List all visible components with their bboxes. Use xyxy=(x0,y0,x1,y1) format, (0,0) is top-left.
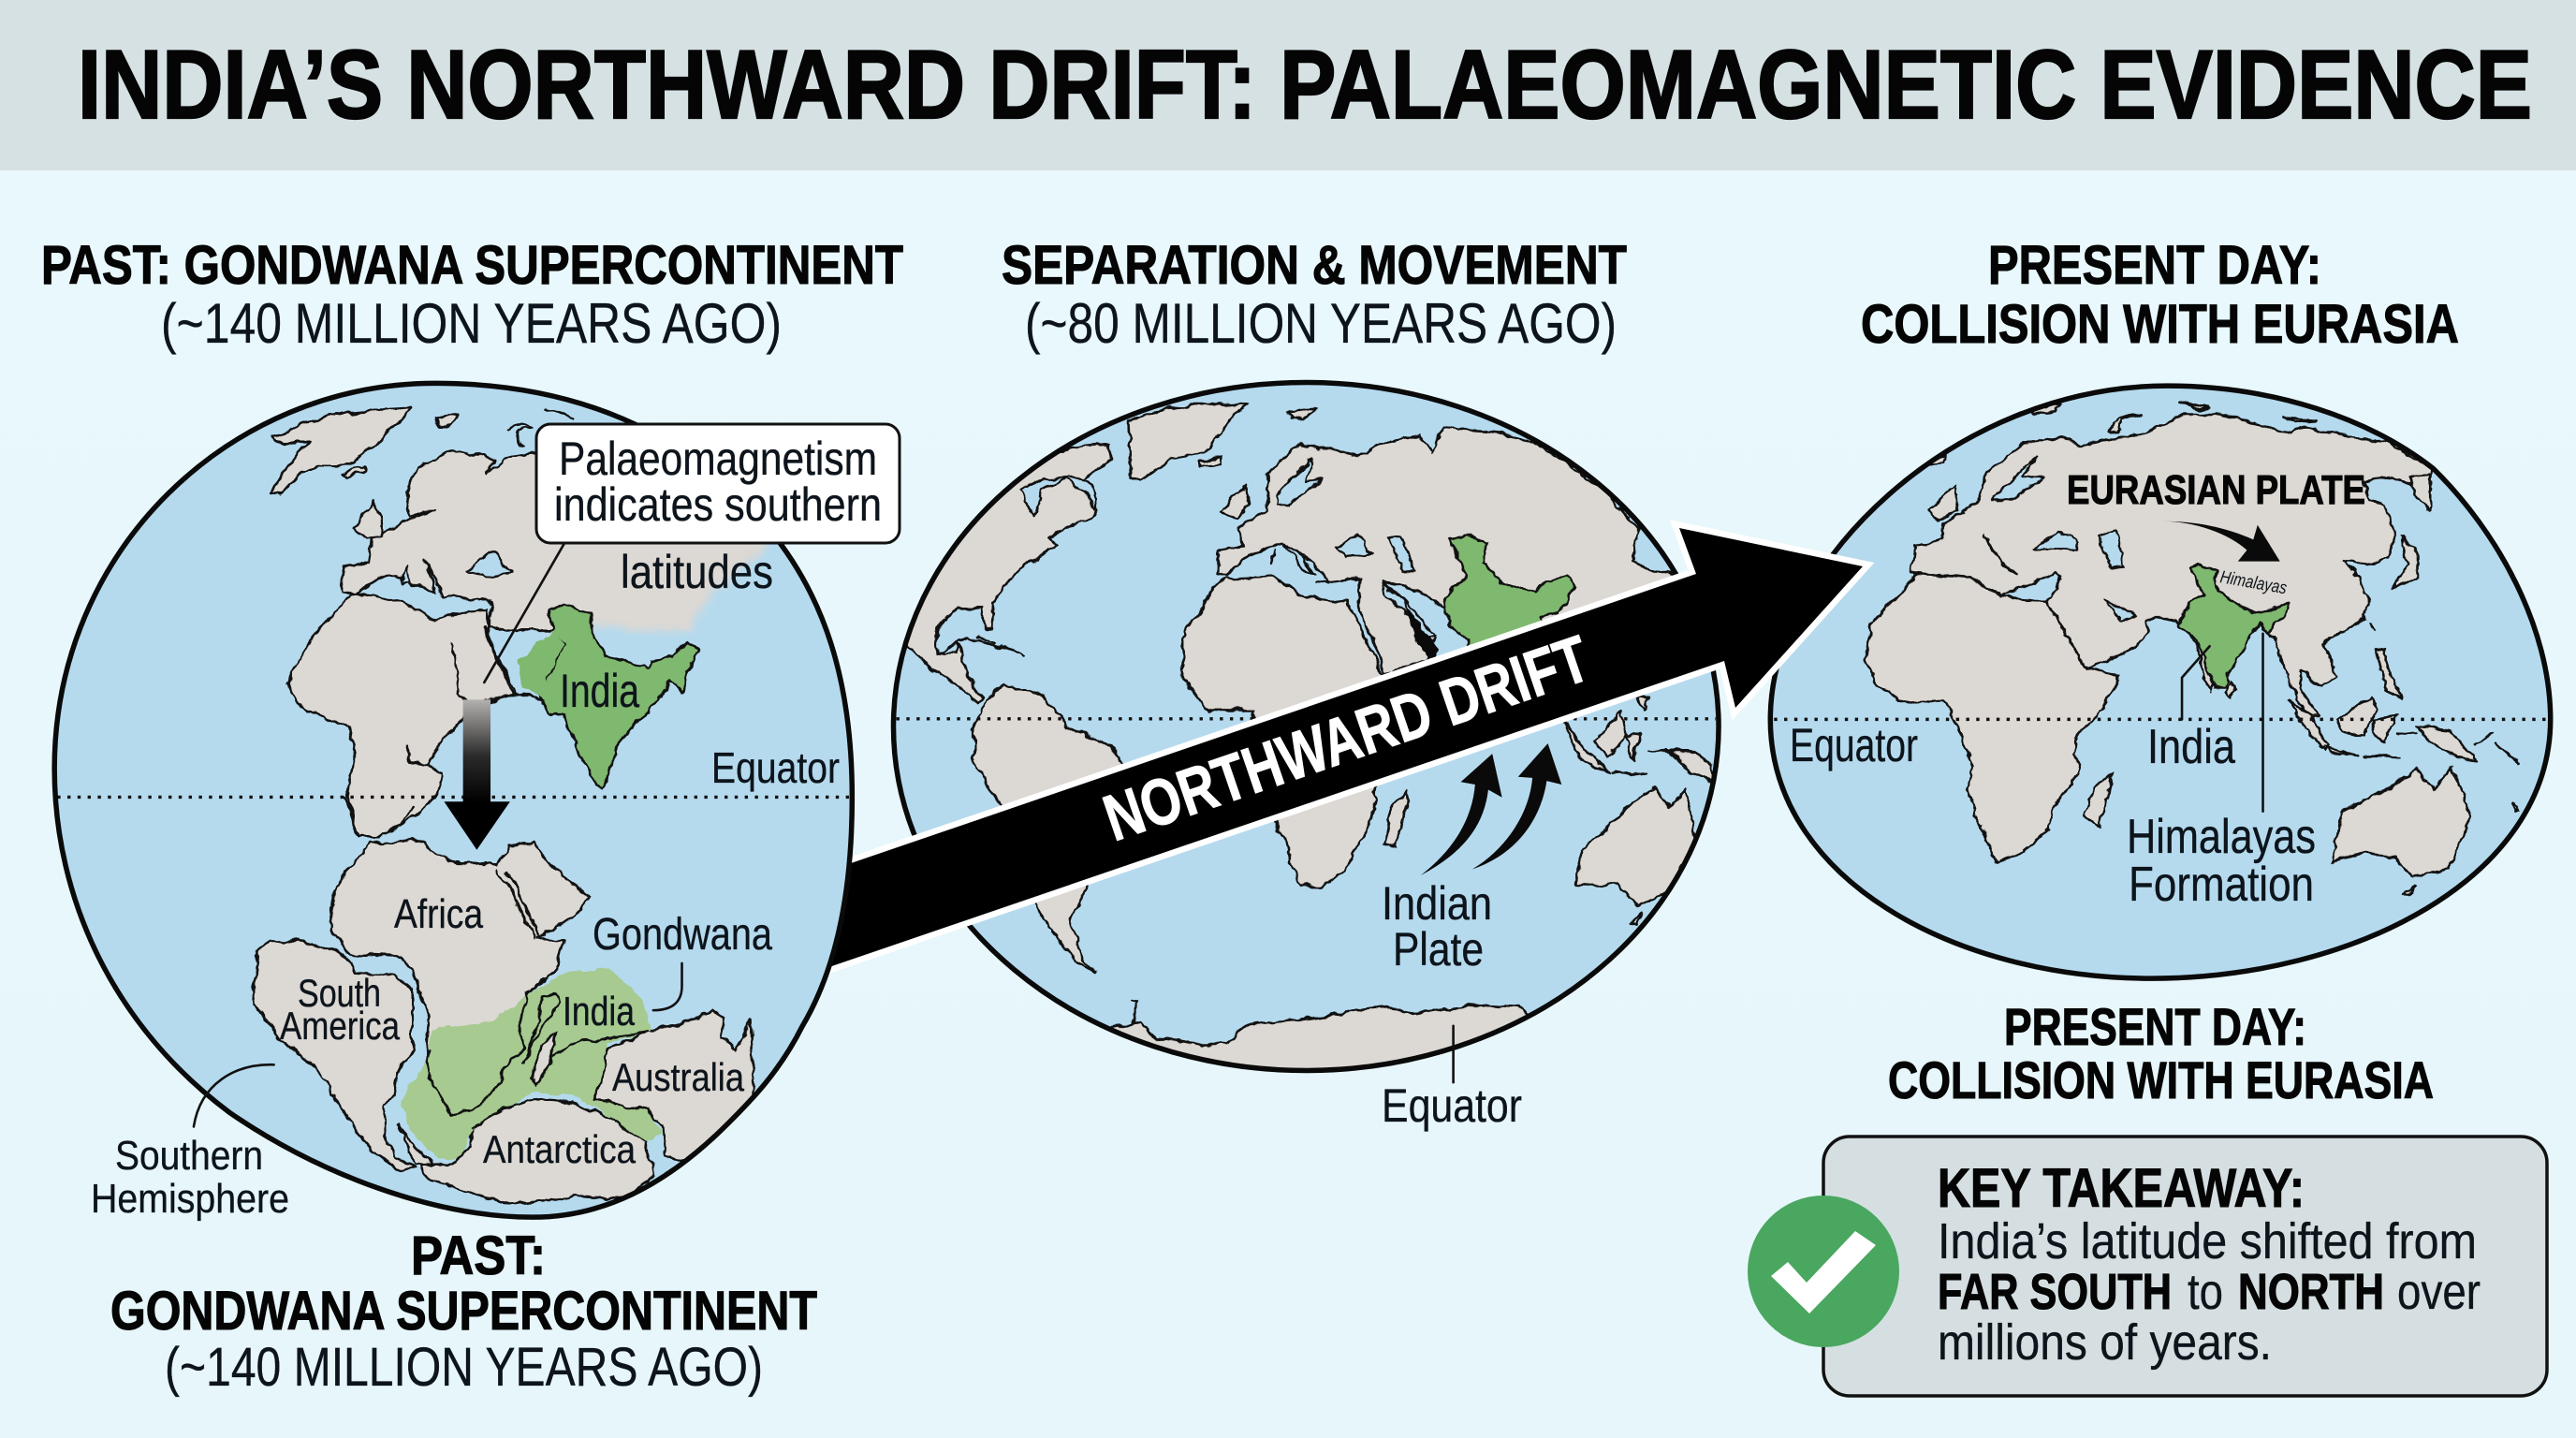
equator line xyxy=(1774,718,2546,721)
label: equator, right globe: Equator xyxy=(1790,719,1918,771)
ocean xyxy=(1770,386,2551,978)
label: Himalayas Formation: Himalayas xyxy=(2127,810,2316,864)
label: Southern Hemisphere xyxy=(91,1133,289,1222)
landmasses xyxy=(255,408,768,1204)
heading: present day: COLLISION WITH EURASIA xyxy=(1861,294,2459,355)
takeaway body: NORTH xyxy=(2238,1264,2384,1320)
heading: present day: PRESENT DAY: xyxy=(1988,235,2321,296)
globe outline xyxy=(893,383,1719,1071)
leader: equator xyxy=(1452,1026,1455,1082)
label: Antarctica: Antarctica xyxy=(483,1127,637,1171)
label: Africa: Africa xyxy=(394,891,483,937)
landmasses xyxy=(907,402,1713,1068)
icon: check mark xyxy=(1748,1196,1899,1347)
label: equator, middle globe: Equator xyxy=(1382,1079,1522,1132)
leader: southern hemisphere xyxy=(194,1064,274,1126)
ocean xyxy=(54,383,852,1217)
globe outline xyxy=(1770,386,2551,978)
icon: drift arrow two xyxy=(1472,743,1561,870)
label: equator, left globe: Equator xyxy=(711,743,840,792)
label: Southern Hemisphere: Hemisphere xyxy=(91,1176,289,1222)
label: Himalayas Formation xyxy=(2127,810,2316,912)
label: South America: America xyxy=(280,1004,401,1048)
takeaway body: FAR SOUTH xyxy=(1938,1264,2172,1320)
caption: past: PAST: xyxy=(411,1225,546,1286)
caption: past: (~140 MILLION YEARS AGO) xyxy=(165,1337,763,1398)
leader: Himalayas xyxy=(2261,634,2264,812)
globe: present day xyxy=(1770,386,2551,978)
label: Gondwana: Gondwana xyxy=(593,910,772,960)
arrow label: NORTHWARD DRIFT xyxy=(1095,622,1599,855)
takeaway body: millions of years. xyxy=(1938,1314,2272,1371)
globe: separation, 80 million years ago xyxy=(865,383,1719,1126)
heading: past: PAST: GONDWANA SUPERCONTINENT xyxy=(41,235,903,296)
takeaway body: India’s latitude shifted from xyxy=(1938,1213,2477,1269)
caption: past: GONDWANA SUPERCONTINENT xyxy=(110,1281,817,1342)
takeaway heading: KEY TAKEAWAY: xyxy=(1938,1158,2305,1219)
leader: Gondwana xyxy=(653,963,682,1010)
caption: past xyxy=(110,1225,817,1398)
equator line xyxy=(57,796,849,799)
callout: palaeomagnetism: indicates southern xyxy=(554,478,882,531)
label: Australia: Australia xyxy=(612,1055,745,1099)
callout: palaeomagnetism: Palaeomagnetism xyxy=(559,433,877,485)
heading: past: (~140 MILLION YEARS AGO) xyxy=(161,292,782,355)
heading: past xyxy=(41,235,903,355)
label: Indian Plate: Plate xyxy=(1393,923,1484,976)
label: Southern Hemisphere: Southern xyxy=(115,1133,263,1179)
label: Himalayas Formation: Formation xyxy=(2129,858,2314,912)
globe outline xyxy=(54,383,852,1217)
equator line xyxy=(897,717,1716,720)
callout: palaeomagnetism xyxy=(536,424,900,543)
icon: Eurasian plate arrow xyxy=(2160,521,2280,562)
icon: drift arrow one xyxy=(1421,754,1502,875)
caption: present day xyxy=(1888,997,2434,1109)
label: India, right globe: India xyxy=(2147,720,2235,774)
leader: callout xyxy=(484,543,564,682)
arrow: southward gradient xyxy=(444,699,510,850)
heading: separation xyxy=(1002,235,1627,355)
caption: present day: PRESENT DAY: xyxy=(2004,997,2306,1056)
label: South America xyxy=(280,971,401,1048)
green: Gondwana India region xyxy=(402,969,662,1158)
leader: India xyxy=(2182,646,2210,719)
landmasses xyxy=(1866,402,2519,896)
heading: present day xyxy=(1861,235,2459,355)
globe: Gondwana, 140 million years ago xyxy=(54,383,852,1217)
label: Eurasian Plate: EURASIAN PLATE xyxy=(2067,467,2365,513)
takeaway body: over xyxy=(2397,1264,2481,1320)
label: India, Gondwana position: India xyxy=(563,989,635,1034)
label: Indian Plate: Indian xyxy=(1382,877,1492,930)
label: Indian Plate xyxy=(1382,877,1492,976)
takeaway body xyxy=(1938,1213,2481,1371)
heading: separation: (~80 MILLION YEARS AGO) xyxy=(1025,292,1617,355)
label: South America: South xyxy=(298,971,381,1015)
ocean xyxy=(893,383,1719,1071)
label: India, north position: India xyxy=(560,665,639,717)
heading: separation: SEPARATION & MOVEMENT xyxy=(1002,235,1627,296)
arrow: northward drift xyxy=(824,528,1863,969)
header band with title xyxy=(0,0,2576,170)
label: latitudes: latitudes xyxy=(621,546,773,598)
green: India xyxy=(538,605,699,788)
caption: present day: COLLISION WITH EURASIA xyxy=(1888,1050,2434,1109)
label: Himalayas small: Himalayas xyxy=(2218,567,2289,598)
panel: key takeaway xyxy=(1748,1137,2547,1396)
takeaway body: to xyxy=(2188,1264,2223,1320)
